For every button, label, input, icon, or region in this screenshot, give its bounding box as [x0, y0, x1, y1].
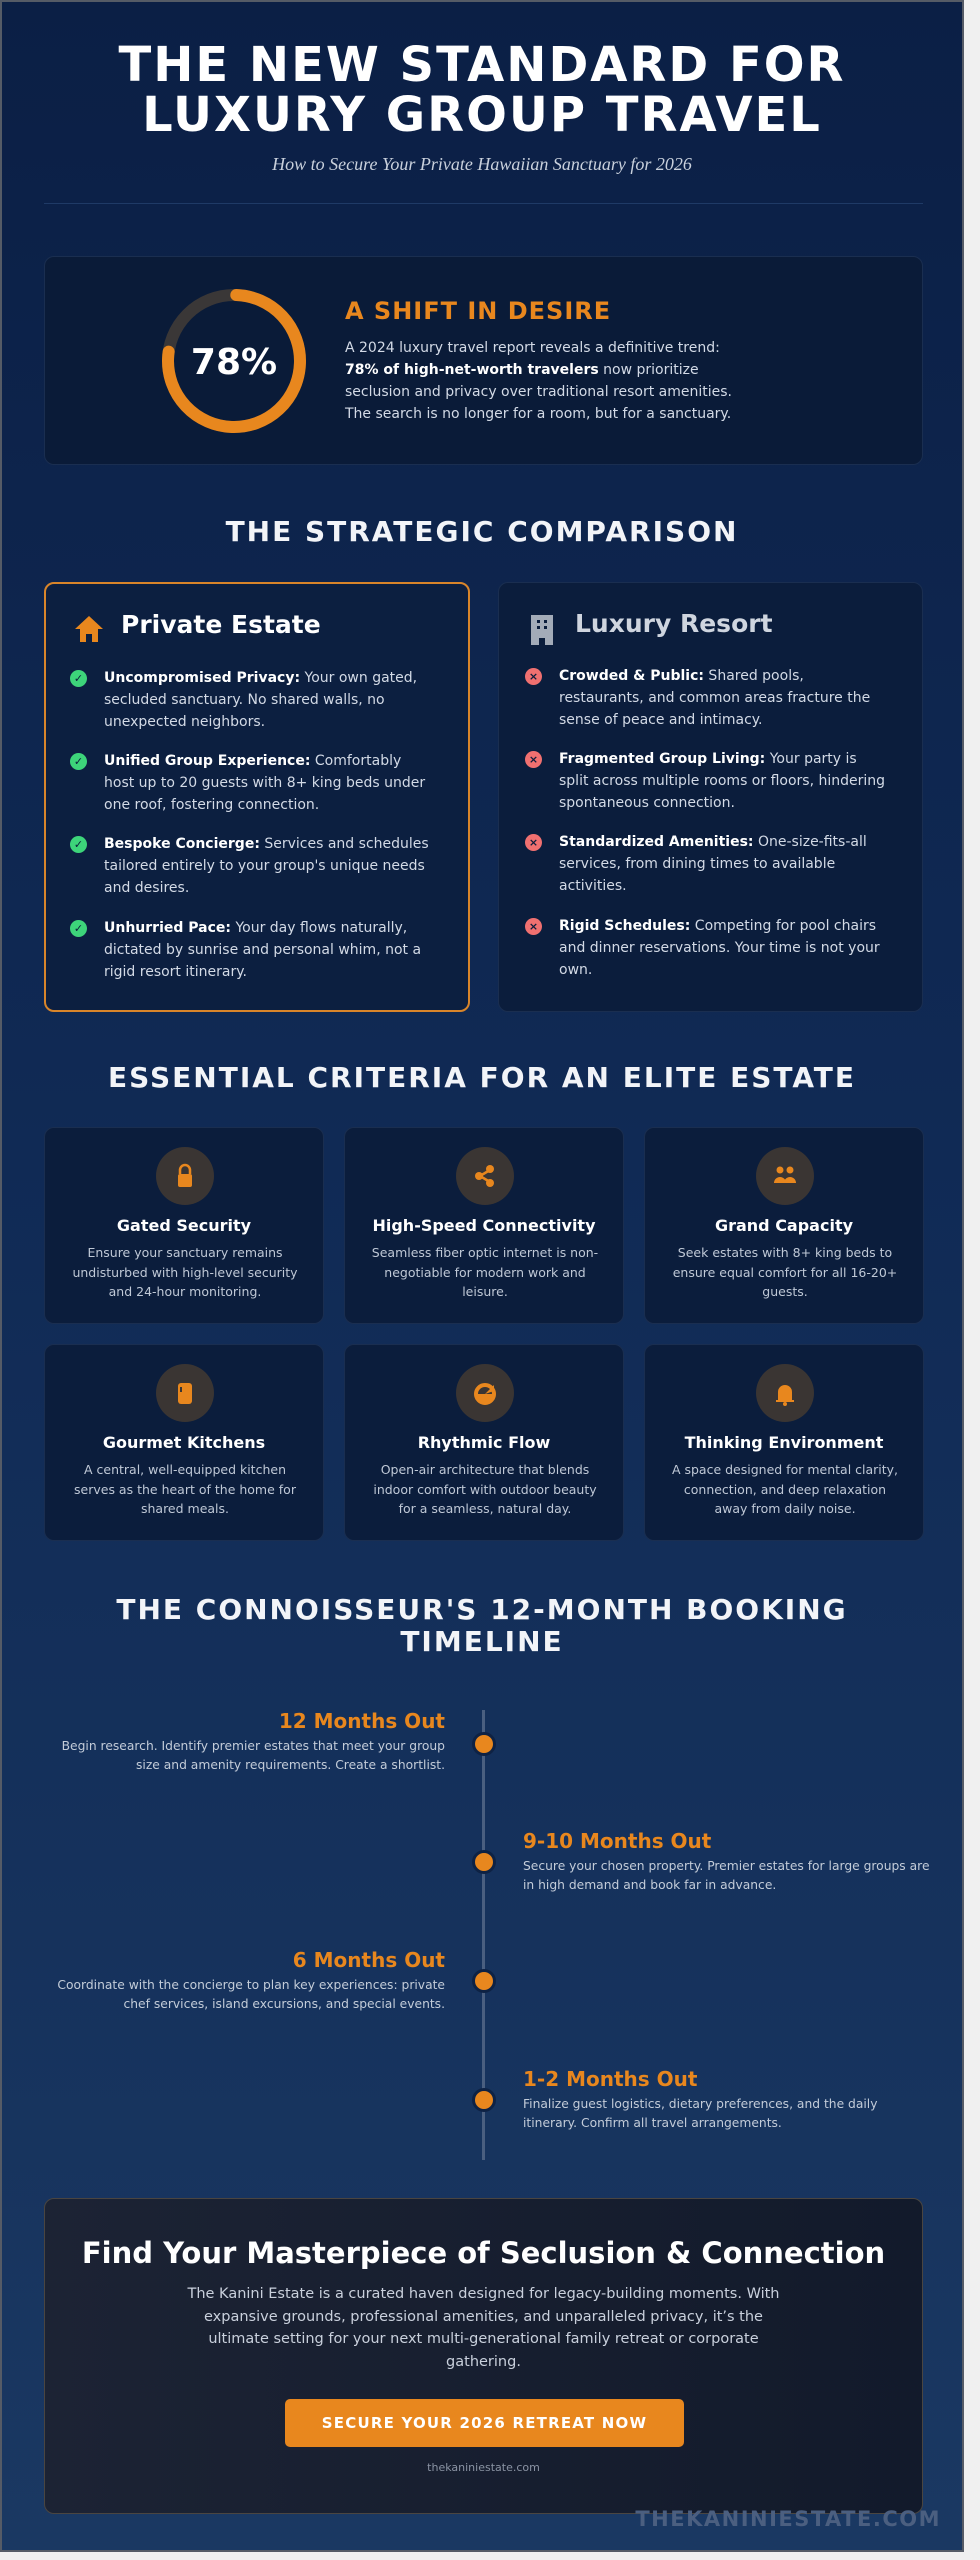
card: gated security — [44, 1127, 324, 1324]
card: rhythmic flow: Open-air architecture that blends indoor comfort with outdoor beauty for a seamless, natural day. — [373, 1462, 597, 1516]
text block: seclusion and privacy over traditional resort amenities. — [345, 384, 732, 400]
panel: private estate: ✓ — [74, 922, 83, 935]
watermark: THEKANINIESTATE.COM — [635, 2507, 941, 2531]
dot — [472, 2088, 496, 2112]
item: Fragmented Group Living: Your party is split across multiple rooms or floors, hindering spontaneous connection. — [559, 751, 885, 811]
heading: timeline — [116, 1593, 848, 1658]
milestone: 9-10 months — [523, 1829, 930, 1892]
panel: luxury resort: × — [529, 836, 538, 849]
card: gourmet kitchens — [44, 1344, 324, 1541]
card: rhythmic flow — [344, 1344, 624, 1541]
icon: house — [75, 616, 103, 642]
title — [118, 37, 846, 143]
milestone: 9-10 months: Secure your chosen property. Premier estates for large groups are in high demand and book far in advance. — [523, 1859, 930, 1892]
card: connectivity: High-Speed Connectivity — [372, 1216, 596, 1235]
icon: building — [531, 615, 553, 645]
panel: private estate: ✓ — [74, 672, 83, 685]
text block — [344, 340, 732, 422]
item: Standardized Amenities: One-size-fits-all services, from dining times to available activities. — [559, 834, 867, 894]
icon: kitchen — [156, 1364, 214, 1422]
icon: lock — [156, 1147, 214, 1205]
card: connectivity: Seamless fiber optic internet is non-negotiable for modern work and leisure. — [372, 1245, 598, 1299]
card: grand capacity — [644, 1127, 924, 1324]
milestone: 1-2 months: 1-2 Months Out — [523, 2067, 697, 2091]
dot — [472, 1850, 496, 1874]
icon: people — [756, 1147, 814, 1205]
milestone: 9-10 months: 9-10 Months Out — [523, 1829, 711, 1853]
panel: private estate — [44, 582, 470, 1012]
card: thinking environment: Thinking Environment — [685, 1433, 883, 1452]
card: grand capacity: Grand Capacity — [715, 1216, 853, 1235]
card: thinking environment — [644, 1344, 924, 1541]
item: Crowded & Public: Shared pools, restaurants, and common areas fracture the sense of peace and intimacy. — [559, 668, 870, 728]
button — [285, 2399, 684, 2447]
item: Unhurried Pace: Your day flows naturally, dictated by sunrise and personal whim, not a rigid resort itinerary. — [104, 920, 421, 980]
milestone: 1-2 months — [523, 2067, 878, 2130]
item: Bespoke Concierge: Services and schedules tailored entirely to your group's unique needs and desires. — [104, 836, 429, 896]
title: LUXURY GROUP TRAVEL — [142, 87, 822, 143]
title: THE NEW STANDARD FOR — [118, 37, 846, 93]
dot — [472, 1969, 496, 1993]
url: thekaniniestate.com — [427, 2461, 540, 2474]
cta text: The Kanini Estate is a curated haven designed for legacy-building moments. With expansive grounds, professional amenities, and unparalleled privacy, it’s the ultimate setting for your next multi-generational family retreat or corporate gathering. — [187, 2286, 780, 2370]
item: Unified Group Experience: Comfortably host up to 20 guests with 8+ king beds under one roof, fostering connection. — [104, 753, 425, 813]
heading: essential criteria: ESSENTIAL CRITERIA FOR AN ELITE ESTATE — [108, 1061, 856, 1094]
panel: luxury resort — [498, 582, 923, 1012]
card: thinking environment: A space designed for mental clarity, connection, and deep relaxation away from daily noise. — [672, 1462, 898, 1516]
icon: swirl — [456, 1364, 514, 1422]
milestone: 6 months — [57, 1948, 445, 2011]
heading: Luxury Resort — [575, 609, 773, 638]
card: grand capacity: Seek estates with 8+ king beds to ensure equal comfort for all 16-20+ guests. — [673, 1245, 897, 1299]
panel: luxury resort: × — [529, 753, 538, 766]
item: Uncompromised Privacy: Your own gated, secluded sanctuary. No shared walls, no unexpected neighbors. — [104, 670, 417, 730]
milestone: 1-2 months: Finalize guest logistics, dietary preferences, and the daily itinerary. Confirm all travel arrangements. — [523, 2097, 878, 2130]
text block: A 2024 luxury travel report reveals a definitive trend: — [345, 340, 720, 356]
milestone: 6 months: 6 Months Out — [293, 1948, 445, 1972]
card: gourmet kitchens: Gourmet Kitchens — [103, 1433, 265, 1452]
heading: A SHIFT IN DESIRE — [345, 297, 611, 325]
heading: strategic comparison: THE STRATEGIC COMPARISON — [226, 515, 738, 548]
card: gated security: Gated Security — [117, 1216, 251, 1235]
donut chart 78% — [162, 289, 306, 433]
panel: private estate: ✓ — [74, 838, 83, 851]
dot — [472, 1732, 496, 1756]
heading: Private Estate — [121, 610, 321, 639]
icon: bell — [756, 1364, 814, 1422]
card: rhythmic flow: Rhythmic Flow — [418, 1433, 550, 1452]
text block: 78% of high-net-worth travelers now prioritize — [345, 362, 699, 378]
item: Rigid Schedules: Competing for pool chairs and dinner reservations. Your time is not your own. — [559, 918, 880, 978]
timeline — [57, 1709, 930, 2160]
text block: The search is no longer for a room, but for a sanctuary. — [345, 406, 731, 422]
heading: timeline: TIMELINE — [400, 1625, 564, 1658]
panel: luxury resort: × — [529, 670, 538, 683]
card: gourmet kitchens: A central, well-equipped kitchen serves as the heart of the home for shared meals. — [74, 1462, 296, 1516]
heading: timeline: THE CONNOISSEUR'S 12-MONTH BOOKING — [116, 1593, 848, 1626]
cta heading: Find Your Masterpiece of Seclusion & Connection — [82, 2236, 885, 2270]
milestone: 6 months: Coordinate with the concierge to plan key experiences: private chef services, island excursions, and special events. — [57, 1978, 445, 2011]
milestone: 12 months: Begin research. Identify premier estates that meet your group size and amenity requirements. Create a shortlist. — [62, 1739, 445, 1772]
panel: private estate: ✓ — [74, 755, 83, 768]
subtitle: How to Secure Your Private Hawaiian Sanctuary for 2026 — [272, 154, 692, 174]
milestone: 12 months: 12 Months Out — [279, 1709, 445, 1733]
milestone: 12 months — [62, 1709, 445, 1772]
icon: share — [456, 1147, 514, 1205]
donut chart 78%: 78% — [191, 342, 277, 383]
button: SECURE YOUR 2026 RETREAT NOW — [322, 2414, 647, 2432]
card: connectivity — [344, 1127, 624, 1324]
panel: luxury resort: × — [529, 920, 538, 933]
card: gated security: Ensure your sanctuary remains undisturbed with high-level security and 24-hour monitoring. — [72, 1245, 298, 1299]
panel: call to action — [44, 2198, 923, 2514]
panel: shift in desire — [44, 256, 923, 465]
